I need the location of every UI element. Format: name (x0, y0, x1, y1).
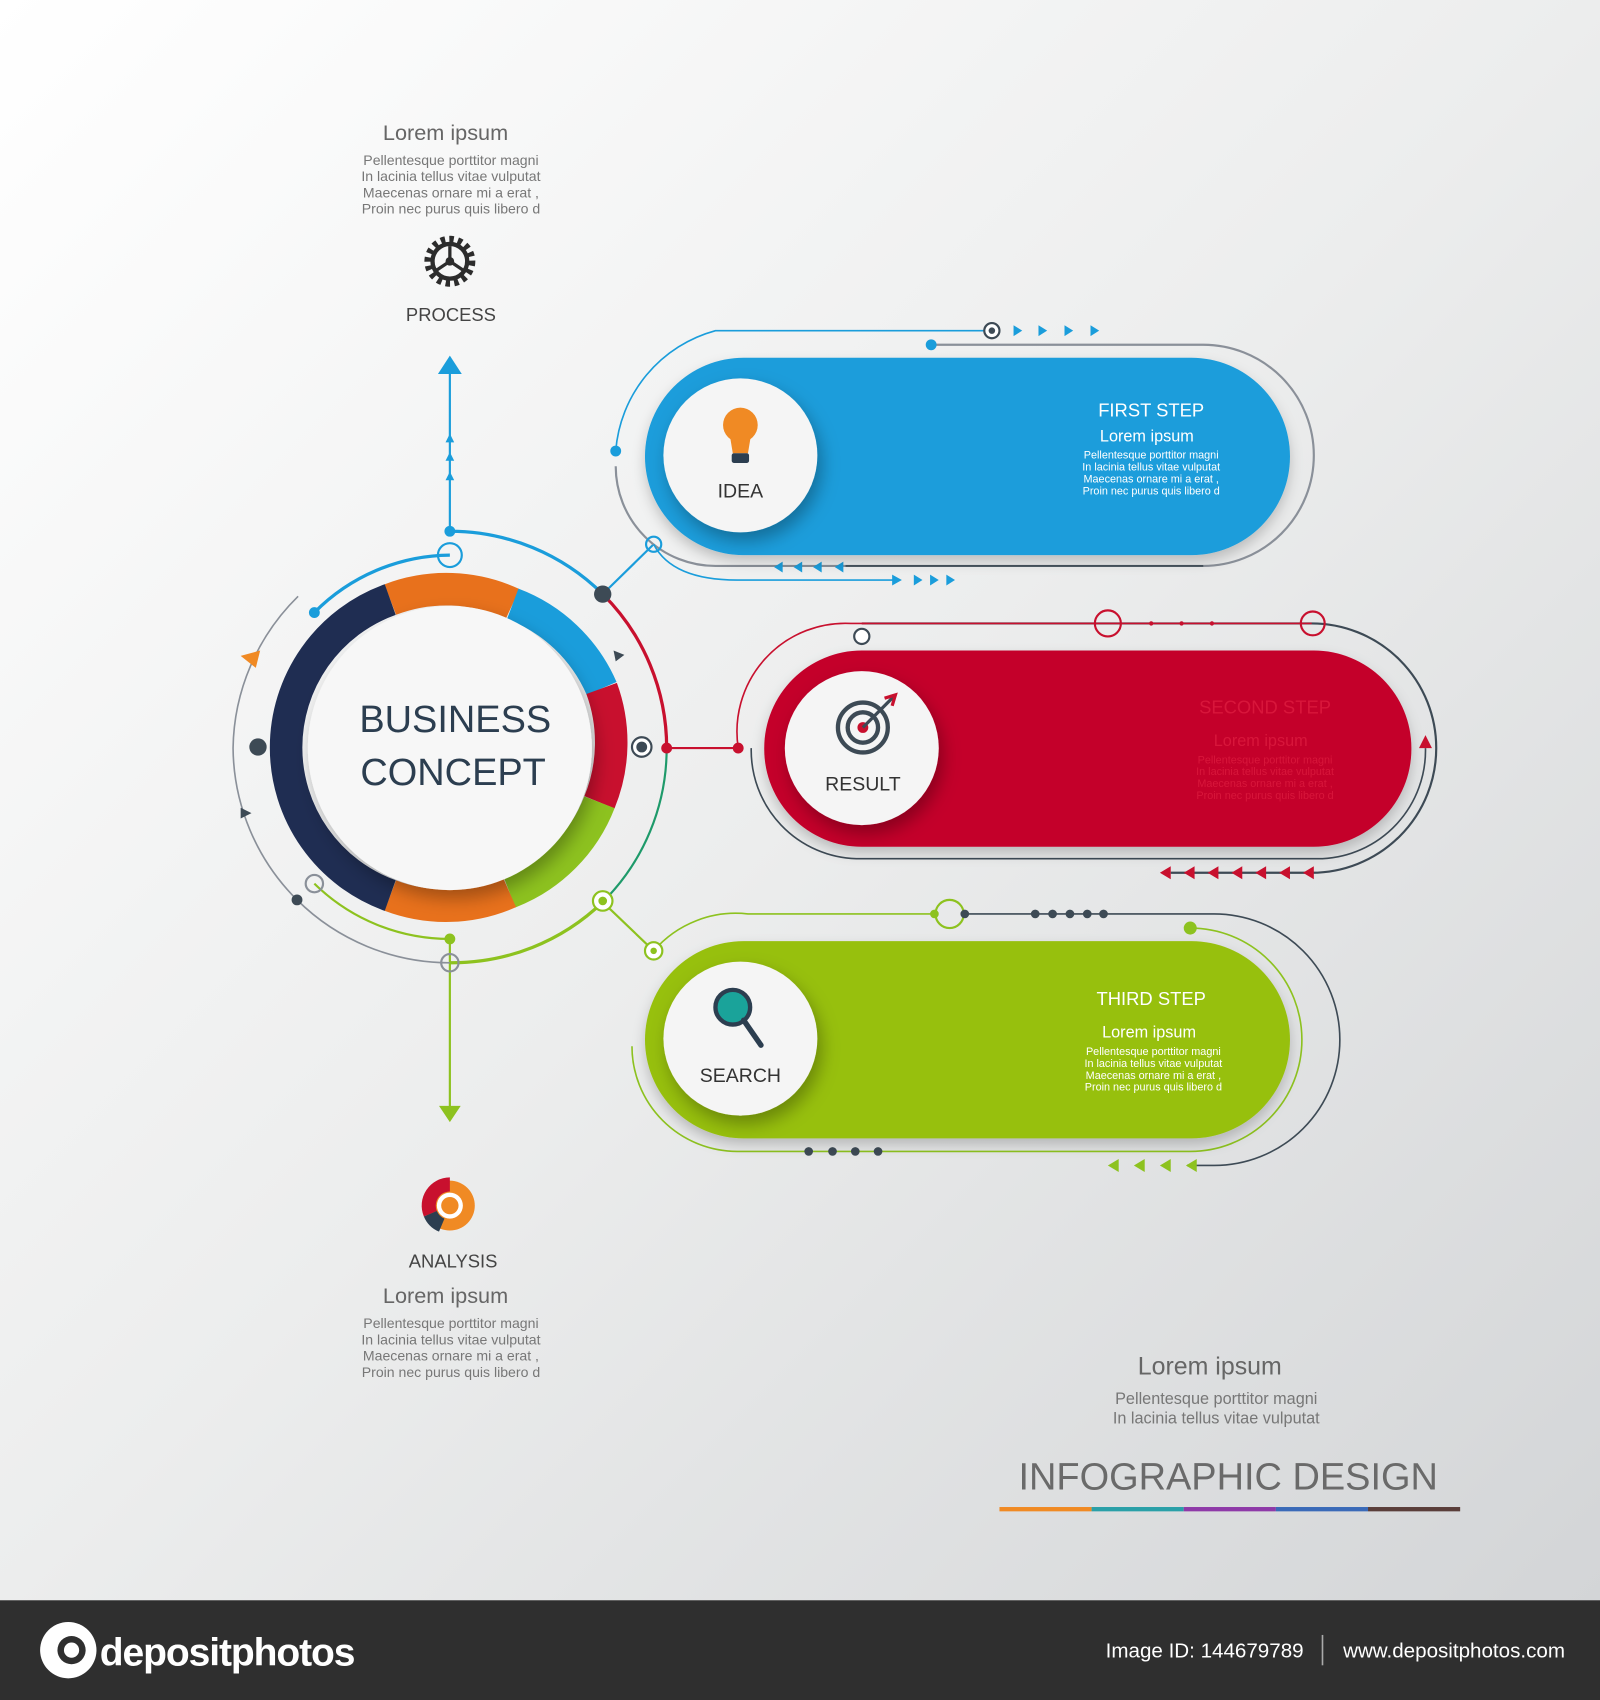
text: first step: Pellentesque porttitor magni (1084, 450, 1219, 462)
icon circle: idea (663, 378, 817, 532)
bottom right text block: Lorem ipsum (1138, 1353, 1282, 1381)
bottom right text block (1113, 1353, 1320, 1428)
top text block: process (361, 120, 541, 217)
text: first step: Lorem ipsum (1100, 427, 1194, 445)
bottom text block: analysis: Proin nec purus quis libero d (362, 1364, 540, 1380)
bottom right text block: In lacinia tellus vitae vulputat (1113, 1410, 1320, 1428)
top text block: process: Lorem ipsum (383, 120, 508, 145)
text: first step: In lacinia tellus vitae vulputat (1082, 462, 1220, 474)
heading: infographic design: INFOGRAPHIC DESIGN (1018, 1457, 1438, 1499)
text: third step: Lorem ipsum (1102, 1024, 1196, 1042)
icon: analysis chart (422, 1177, 475, 1232)
bottom text block: analysis: Lorem ipsum (383, 1283, 508, 1308)
panel: third step (632, 900, 1340, 1172)
panel: second step (733, 610, 1436, 879)
footer image id: Image ID: 144679789 (1106, 1640, 1304, 1663)
underline color bar (999, 1507, 1460, 1511)
top text block: process: Pellentesque porttitor magni (363, 152, 539, 168)
text: second step: Pellentesque porttitor magni (1198, 754, 1332, 766)
icon: gear (428, 240, 472, 283)
title: business concept: BUSINESS (359, 699, 551, 741)
text: third step: Pellentesque porttitor magni (1086, 1046, 1221, 1058)
icon circle: idea: IDEA (718, 481, 763, 503)
text: first step: Maecenas ornare mi a erat , (1084, 473, 1219, 485)
text: third step (1084, 988, 1222, 1094)
bottom text block: analysis: Pellentesque porttitor magni (363, 1315, 539, 1331)
text: third step: Maecenas ornare mi a erat , (1086, 1070, 1221, 1082)
top text block: process: Proin nec purus quis libero d (362, 201, 540, 217)
bottom text block: analysis: Maecenas ornare mi a erat , (363, 1348, 539, 1364)
footer band (0, 1600, 1600, 1700)
nodes (241, 543, 672, 971)
central circle: business concept (286, 589, 611, 906)
text: first step: Proin nec purus quis libero d (1083, 485, 1220, 497)
footer logo: depositphotos (100, 1631, 355, 1674)
text: third step: Proin nec purus quis libero d (1085, 1082, 1222, 1094)
text: second step: SECOND STEP (1199, 696, 1331, 717)
central circle: business concept: CONCEPT (360, 752, 546, 794)
text: third step: THIRD STEP (1097, 988, 1206, 1009)
label: process: PROCESS (406, 304, 496, 325)
text: second step: Maecenas ornare mi a erat , (1197, 778, 1333, 790)
text: second step (1196, 696, 1334, 802)
top text block: process: In lacinia tellus vitae vulputat (361, 168, 541, 184)
footer logo (40, 1622, 355, 1678)
text: second step: In lacinia tellus vitae vulputat (1196, 766, 1334, 778)
bottom text block: analysis (361, 1283, 541, 1380)
label: analysis: ANALYSIS (409, 1250, 497, 1271)
icon circle: search (663, 962, 817, 1116)
text: second step: Lorem ipsum (1214, 732, 1308, 750)
panel: first step (610, 323, 1314, 585)
arrow: up line (438, 356, 462, 537)
icon circle: result: RESULT (825, 773, 901, 795)
text: second step: Proin nec purus quis libero d (1196, 790, 1334, 802)
top text block: process: Maecenas ornare mi a erat , (363, 184, 539, 200)
arrow: down line (439, 938, 461, 1122)
footer url: www.depositphotos.com (1342, 1640, 1565, 1663)
text: first step (1082, 399, 1220, 497)
icon circle: result (785, 671, 939, 825)
bottom right text block: Pellentesque porttitor magni (1115, 1390, 1317, 1408)
bottom text block: analysis: In lacinia tellus vitae vulputat (361, 1331, 541, 1347)
text: first step: FIRST STEP (1098, 399, 1204, 420)
icon circle: search: SEARCH (700, 1065, 781, 1087)
ring segments (286, 589, 611, 906)
connector lines (233, 531, 738, 963)
text: third step: In lacinia tellus vitae vulputat (1084, 1058, 1222, 1070)
